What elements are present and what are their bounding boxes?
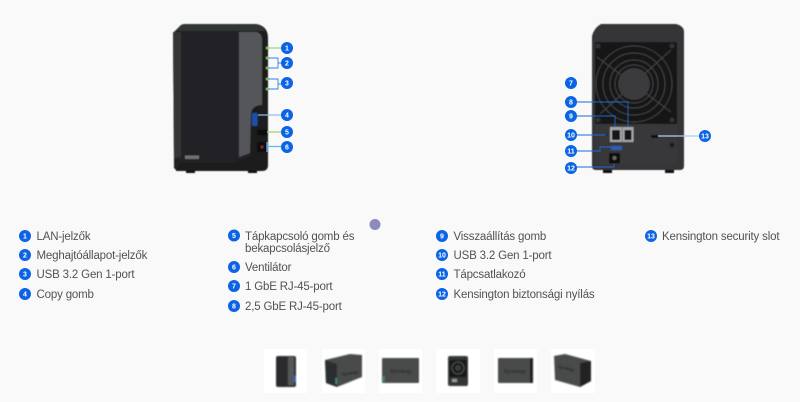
fan screws: [596, 44, 674, 122]
power button: [257, 142, 267, 152]
legend column 3: Kensington biztonsági nyílás: [454, 289, 595, 301]
legend column 1: USB 3.2 Gen 1-port: [36, 269, 135, 281]
fan frame: [595, 42, 677, 124]
copy button: [257, 130, 267, 136]
rear callout lines: [576, 102, 700, 167]
rear callout badges: 13: [701, 134, 709, 140]
legend column 3: 10: [438, 252, 446, 260]
legend column 1: 3: [23, 272, 27, 278]
model label: [185, 156, 199, 159]
legend column 3: 9: [440, 234, 444, 240]
rear callout badges: 8: [569, 100, 573, 106]
front callout badges: 5: [285, 130, 289, 136]
front callout badges: 2: [285, 60, 289, 68]
thumbnail 6: angled right: [551, 349, 595, 393]
thumbnail 2: angled left: [322, 349, 365, 393]
front top shoulder: [176, 24, 265, 31]
thumbnail 3: side: Synology: [390, 369, 412, 375]
USB port rear: [611, 146, 622, 150]
rear callout badges: 12: [567, 166, 575, 172]
legend column 3: [436, 230, 595, 301]
USB port: [252, 113, 258, 126]
front panel grey strip: [239, 32, 262, 157]
thumbnail 5: other side: Synology: [504, 369, 526, 375]
legend column 1: 1: [23, 234, 27, 240]
power symbol: [260, 146, 264, 148]
front callout badges: 1: [285, 46, 289, 52]
rear callout badges: 9: [569, 114, 573, 120]
front panel: [173, 32, 262, 170]
legend column 2: Tápkapcsoló gomb és: [245, 231, 355, 243]
legend column 3: USB 3.2 Gen 1-port: [454, 250, 552, 262]
power connector: [609, 153, 620, 164]
fan hub: [618, 68, 650, 100]
reset button: [605, 134, 607, 136]
legend column 4: 13: [647, 234, 655, 240]
front callout badges: [281, 42, 293, 153]
legend column 2: 7: [232, 284, 236, 290]
legend column 1: 2: [23, 252, 27, 260]
front callout badges: 3: [285, 80, 289, 88]
legend column 3: Visszaállítás gomb: [454, 231, 546, 243]
legend column 2: Ventilátor: [245, 262, 292, 274]
legend column 1: [19, 230, 148, 301]
left edge highlight: [173, 32, 181, 158]
LED indicators: [266, 47, 269, 90]
legend column 1: 4: [23, 292, 27, 298]
Kensington slot: [651, 135, 658, 138]
legend column 2: 8: [232, 304, 236, 310]
legend column 2: 1 GbE RJ-45-port: [245, 281, 333, 293]
LAN port 2: [622, 127, 634, 142]
legend column 3: 11: [438, 272, 446, 278]
legend column 3: 12: [438, 292, 446, 298]
feet: [186, 171, 257, 173]
front callout badges: 4: [285, 112, 289, 120]
legend column 2: [228, 230, 355, 313]
rear screw: [670, 142, 674, 148]
legend column 2: 6: [232, 264, 236, 272]
front callout lines: [258, 48, 282, 152]
legend column 2: 5: [232, 233, 236, 240]
rear callout badges: 11: [567, 148, 575, 156]
thumbnail 5: other side: [494, 349, 537, 393]
rear callout badges: [565, 77, 711, 174]
rear view of NAS device: [592, 24, 684, 173]
legend column 1: LAN-jelzők: [36, 231, 91, 243]
legend column 3: Tápcsatlakozó: [454, 269, 525, 281]
legend column 4: Kensington security slot: [662, 231, 780, 243]
legend column 1: Meghajtóállapot-jelzők: [36, 250, 148, 262]
rear callout badges: 10: [567, 132, 575, 140]
legend column 2: 2,5 GbE RJ-45-port: [245, 301, 343, 313]
thumbnail 6: angled right: Synology: [558, 364, 576, 373]
front callout badges: 6: [285, 144, 289, 152]
LAN port 1: [610, 127, 622, 142]
thumbnail 2: angled left: Synology: [341, 369, 359, 377]
thumbnail 3: side: [379, 349, 422, 393]
rear callout badges: 7: [569, 80, 573, 88]
rear feet: [603, 170, 674, 173]
rear IO plate: [595, 124, 677, 165]
thumbnail 4: rear: [436, 349, 480, 393]
legend column 2: bekapcsolásjelző: [245, 243, 330, 255]
thumbnail 1: front: [264, 349, 307, 393]
front view of NAS device: [173, 24, 269, 173]
decorative purple dot: [370, 219, 380, 230]
fan grille: [596, 46, 672, 122]
legend column 1: Copy gomb: [36, 289, 94, 301]
